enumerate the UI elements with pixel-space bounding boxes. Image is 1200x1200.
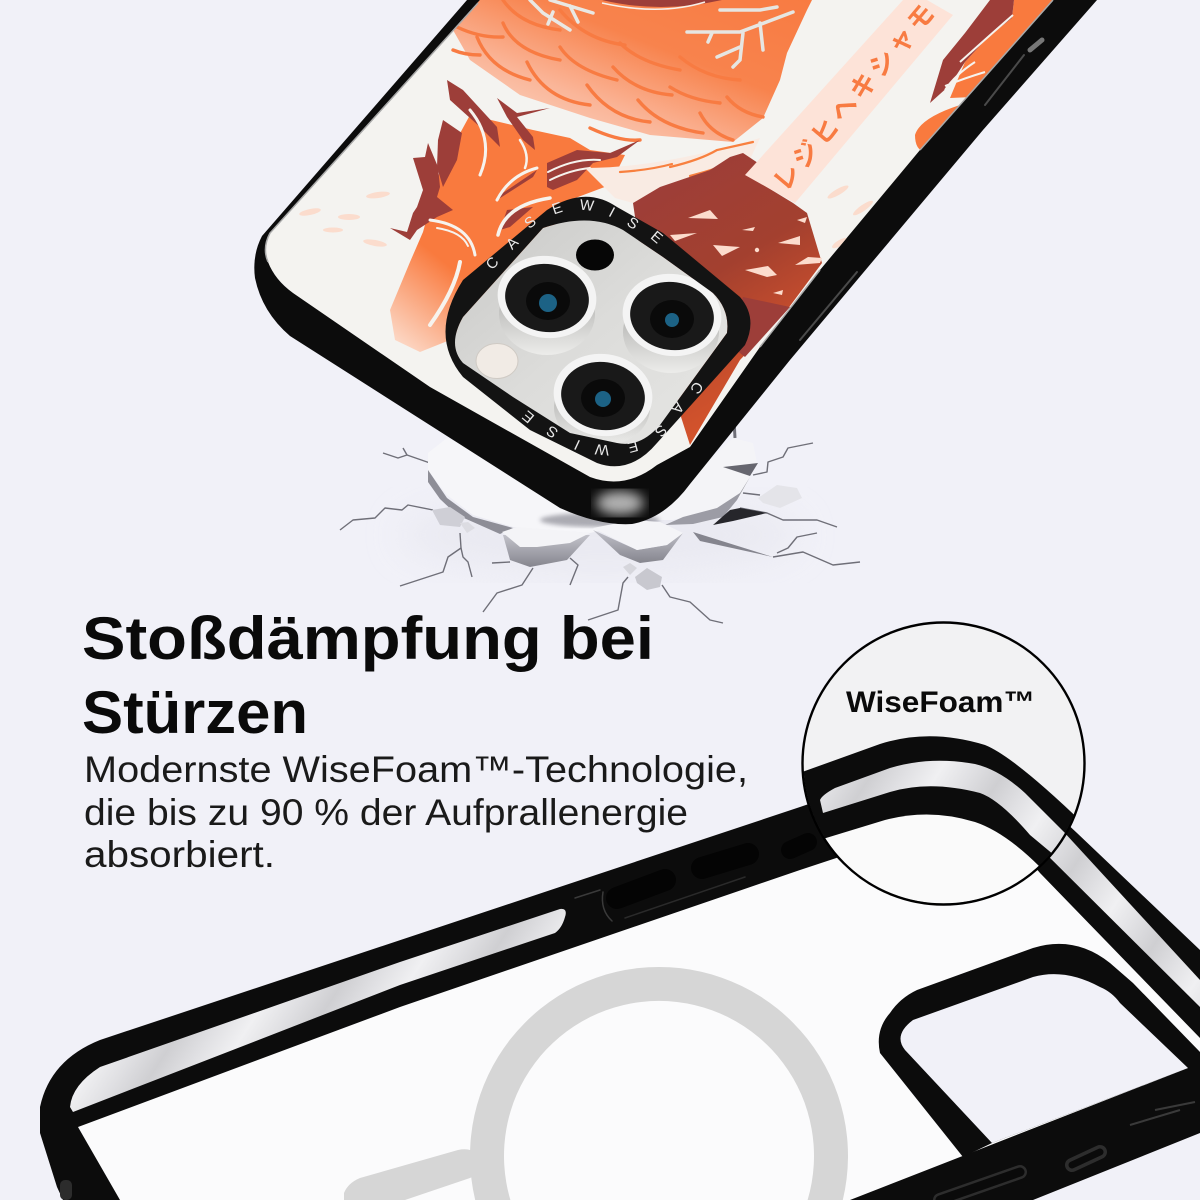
magnified clear interior: [825, 814, 1039, 904]
dark shard: [723, 463, 758, 476]
magnified foam band: [820, 760, 1065, 853]
body text: Modernste WiseFoam™-Technologie,: [84, 749, 748, 790]
right plate rim: [665, 477, 750, 525]
bottom clear case: [40, 766, 1200, 1200]
dark crack: [713, 508, 767, 525]
CASEWISE lettering: E: [550, 199, 565, 218]
flame dark tufts: [390, 80, 640, 240]
left port: [60, 1180, 72, 1200]
side buttons: [575, 842, 808, 921]
scales wave: [453, 0, 812, 142]
CASEWISE lettering: W: [593, 440, 610, 458]
camera island: [446, 197, 750, 466]
clear interior: [78, 829, 1200, 1200]
CASEWISE lettering: S: [543, 422, 561, 441]
CASEWISE lettering: I: [606, 204, 617, 221]
bottom edge highlights: [1130, 1102, 1195, 1125]
foam band right: [1030, 806, 1200, 1007]
CASEWISE lettering: E: [647, 228, 666, 247]
coral left: [530, 0, 593, 30]
fragment: bottom centre: [593, 520, 683, 563]
sun specks: [670, 210, 822, 295]
banner lettering: レジヒヘキシャモ: [767, 0, 941, 197]
red sun: [633, 153, 822, 445]
CASEWISE lettering: C: [483, 254, 503, 273]
CASEWISE lettering: S: [521, 213, 540, 232]
CASEWISE lettering: W: [579, 197, 596, 215]
heading: Stoßdämpfung bei: [82, 605, 654, 672]
callout label: WiseFoam™: [846, 686, 1035, 719]
body text: absorbiert.: [84, 834, 275, 875]
right hair dark: [930, 0, 1014, 103]
crack lines: [340, 420, 860, 623]
cracked ground impact: [340, 420, 860, 623]
CASEWISE lettering: [483, 197, 706, 458]
body text: die bis zu 90 % der Aufprallenergie: [84, 792, 688, 833]
CASEWISE lettering: I: [572, 436, 583, 453]
left plate rim: [428, 470, 513, 534]
CASEWISE lettering: C: [686, 378, 706, 397]
right hair orange: [950, 0, 1055, 98]
lidar: [576, 240, 614, 270]
back panel artwork: [255, 0, 1065, 490]
callout circle magnified view: [804, 736, 1074, 904]
camera rim: [879, 944, 1200, 1157]
white foam over sun: [585, 138, 760, 205]
scale arcs: [453, 0, 763, 140]
panel silver edge: [265, 0, 1053, 347]
side buttons: [800, 40, 1042, 340]
crack wedge: [693, 532, 773, 557]
CASEWISE lettering: S: [651, 421, 670, 440]
left plate: [428, 438, 640, 533]
top phone with case: [254, 0, 1097, 524]
pale petals: [299, 183, 875, 250]
bottom ports: [940, 1152, 1100, 1200]
fragment: right stone: [758, 485, 802, 508]
right orange blob: [915, 106, 958, 150]
lens 2: [617, 268, 727, 373]
island bezel: [446, 197, 750, 466]
magnified frame: [804, 736, 1074, 904]
sun lower dark band: [739, 297, 790, 357]
foam orange strands: [620, 142, 753, 176]
callout circle outline: [802, 622, 1084, 904]
right hair white strands: [945, 15, 1013, 90]
fragment: bottom left: [502, 527, 590, 567]
flame white strands: [430, 110, 600, 325]
CASEWISE lettering: E: [626, 437, 640, 456]
CASEWISE lettering: A: [503, 234, 522, 253]
magsafe ring: [470, 967, 848, 1200]
right plate: [650, 438, 757, 520]
CASEWISE lettering: E: [519, 407, 538, 426]
dark moon arc: [602, 0, 722, 7]
black bumper case: [254, 0, 1097, 524]
island plate: [455, 220, 727, 444]
lens 1: [492, 250, 602, 355]
case highlight: [596, 491, 644, 515]
fragments: bottom stones: [623, 563, 662, 590]
heading: Stürzen: [82, 679, 308, 746]
outer black frame: [40, 766, 1200, 1200]
heading: [82, 605, 654, 746]
foam band left: [70, 909, 566, 1112]
CASEWISE lettering: A: [668, 398, 687, 417]
flame orange: [390, 115, 625, 352]
camera cutout: [900, 974, 1188, 1143]
lens 3: [548, 348, 658, 446]
magsafe bar: [344, 1149, 482, 1200]
CASEWISE lettering: S: [624, 214, 642, 233]
banner: [745, 0, 953, 203]
body text: [84, 749, 748, 875]
shadow under phone: [540, 513, 660, 527]
fragment: left stones: [432, 507, 475, 533]
coral right: [687, 7, 793, 67]
moon outline: [602, 2, 705, 9]
flash: [476, 344, 518, 378]
